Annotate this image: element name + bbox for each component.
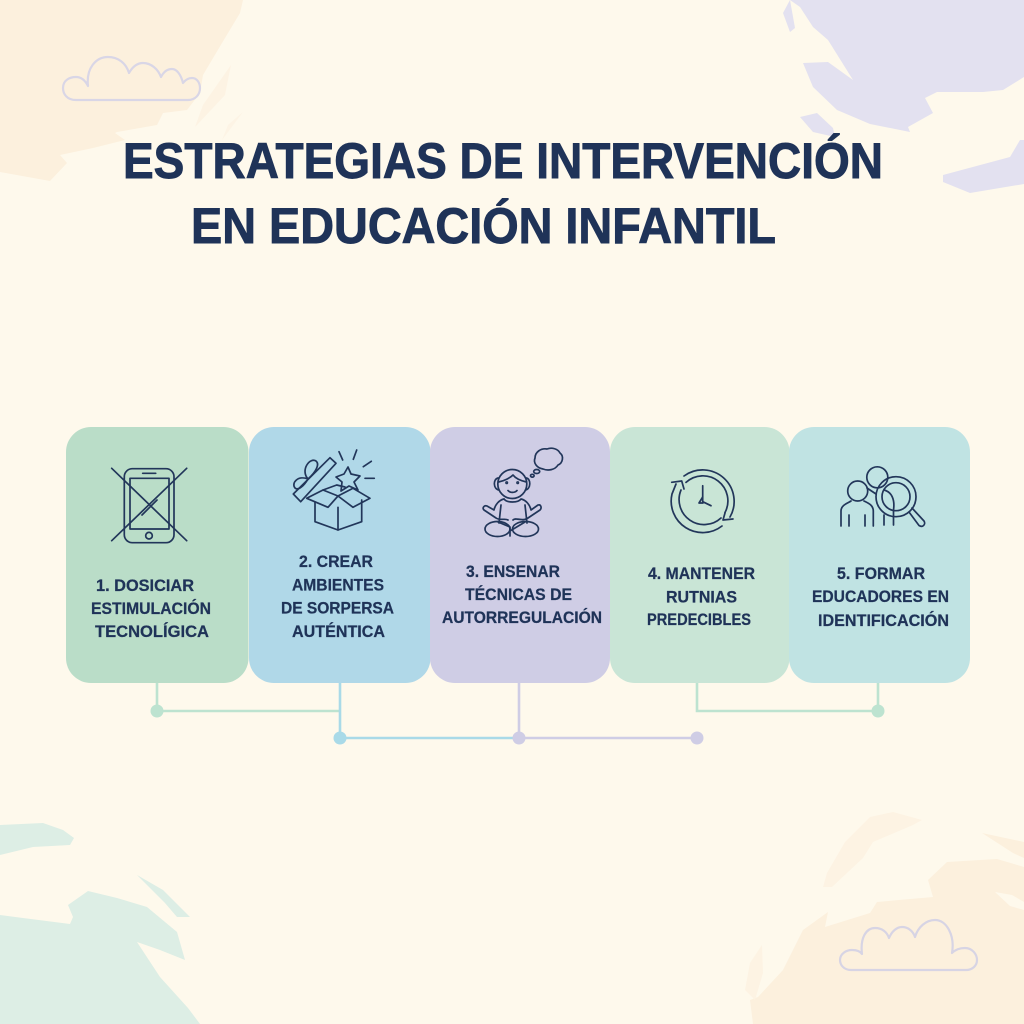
label: strategy 3: [442, 563, 602, 627]
background brush: bottom left: [0, 823, 200, 1024]
icon: cloud bottom right: [840, 920, 977, 970]
label: strategy 5: IDENTIFICACIÓN: [818, 611, 949, 630]
label: strategy 2: DE SORPERSA: [281, 600, 394, 618]
label: strategy 2: [281, 553, 394, 641]
label: strategy 1: ESTIMULACIÓN: [91, 599, 211, 618]
icon: clock with cycle arrows: [671, 470, 734, 533]
label: strategy 3: 3. ENSENAR: [466, 563, 560, 581]
label: strategy 3: TÉCNICAS DE: [465, 585, 572, 604]
label: strategy 2: 2. CREAR: [299, 553, 373, 571]
icon: people under magnifying glass: [841, 467, 925, 526]
connector nodes: [150, 704, 884, 744]
panel: strategy 3: [430, 427, 610, 683]
label: strategy 1: [91, 577, 211, 641]
label: strategy 4: 4. MANTENER: [648, 565, 755, 583]
label: strategy 5: EDUCADORES EN: [812, 588, 949, 606]
background brush: top right: [783, 0, 1024, 193]
label: strategy 1: TECNOLÍGICA: [95, 622, 209, 641]
background brush: top left: [0, 0, 243, 181]
title: [123, 133, 883, 254]
label: strategy 3: AUTORREGULACIÓN: [442, 608, 602, 627]
label: strategy 4: PREDECIBLES: [647, 611, 751, 629]
icon: meditating child with thought bubble: [483, 448, 562, 536]
icon: crossed-out phone: [112, 468, 187, 543]
label: strategy 4: [647, 565, 755, 629]
label: strategy 2: AUTÉNTICA: [292, 622, 385, 641]
label: strategy 2: AMBIENTES: [292, 576, 384, 594]
connector lines: [157, 683, 878, 738]
panel: strategy 5: [789, 427, 970, 683]
background brush: bottom right: [745, 812, 1024, 1024]
label: strategy 5: 5. FORMAR: [837, 565, 925, 583]
panel: strategy 2: [249, 427, 430, 683]
icon: surprise gift box: [293, 450, 374, 530]
panel: strategy 1: [66, 427, 248, 683]
label: strategy 5: [812, 565, 949, 630]
label: strategy 1: 1. DOSICIAR: [96, 577, 194, 595]
title: EN EDUCACIÓN INFANTIL: [191, 198, 776, 254]
icon: cloud top left: [63, 57, 200, 100]
panel: strategy 4: [610, 427, 790, 683]
label: strategy 4: RUTNIAS: [666, 588, 737, 606]
title: ESTRATEGIAS DE INTERVENCIÓN: [123, 133, 883, 189]
